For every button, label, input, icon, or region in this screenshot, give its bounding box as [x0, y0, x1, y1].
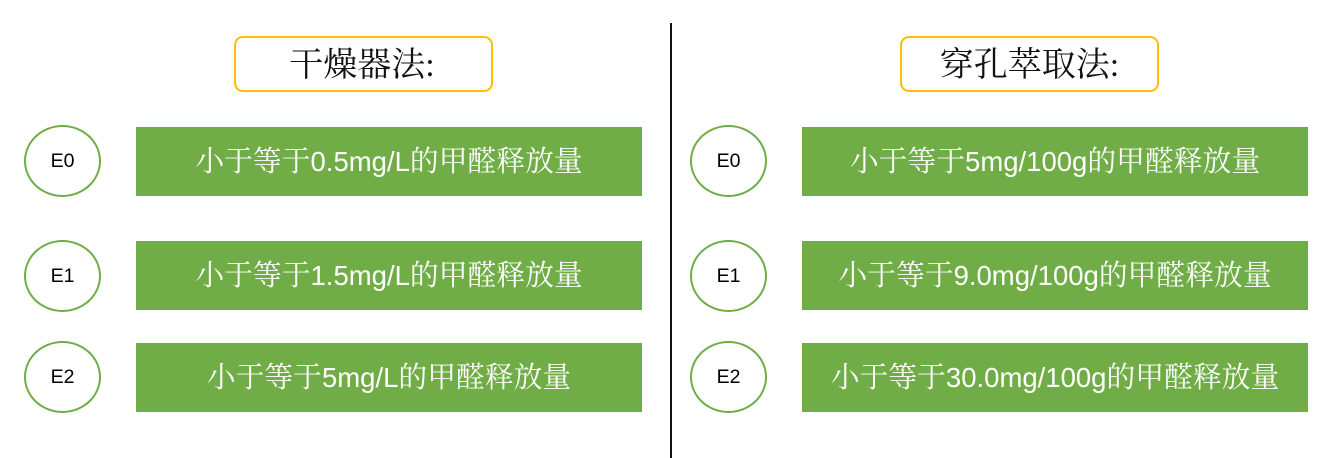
heading: desiccator method: 干燥器法:	[289, 47, 435, 84]
bar: right E2 limit: 小于等于30.0mg/100g的甲醛释放量	[831, 355, 1279, 396]
bar: right E0 limit: 小于等于5mg/100g的甲醛释放量	[850, 139, 1260, 180]
bar: right E0 limit	[802, 127, 1308, 196]
badge: right E1	[690, 240, 767, 312]
badge: right E1: E1	[717, 265, 740, 287]
bar: left E2 limit: 小于等于5mg/L的甲醛释放量	[207, 355, 571, 396]
bar: right E1 limit: 小于等于9.0mg/100g的甲醛释放量	[838, 253, 1272, 294]
badge: right E0	[690, 125, 767, 197]
badge: right E2	[690, 341, 767, 413]
badge: left E1	[24, 240, 101, 312]
heading: desiccator method	[234, 36, 493, 92]
heading: perforation extraction method: 穿孔萃取法:	[940, 47, 1119, 84]
badge: left E0	[24, 125, 101, 197]
vertical divider	[670, 23, 672, 458]
bar: right E1 limit	[802, 241, 1308, 310]
badge: left E2	[24, 341, 101, 413]
badge: right E2: E2	[717, 366, 740, 388]
bar: right E2 limit	[802, 343, 1308, 412]
badge: left E0: E0	[51, 150, 74, 172]
bar: left E0 limit	[136, 127, 642, 196]
bar: left E2 limit	[136, 343, 642, 412]
bar: left E1 limit	[136, 241, 642, 310]
bar: left E1 limit: 小于等于1.5mg/L的甲醛释放量	[195, 253, 583, 294]
badge: left E2: E2	[51, 366, 74, 388]
badge: left E1: E1	[51, 265, 74, 287]
heading: perforation extraction method	[900, 36, 1159, 92]
badge: right E0: E0	[717, 150, 740, 172]
bar: left E0 limit: 小于等于0.5mg/L的甲醛释放量	[195, 139, 583, 180]
